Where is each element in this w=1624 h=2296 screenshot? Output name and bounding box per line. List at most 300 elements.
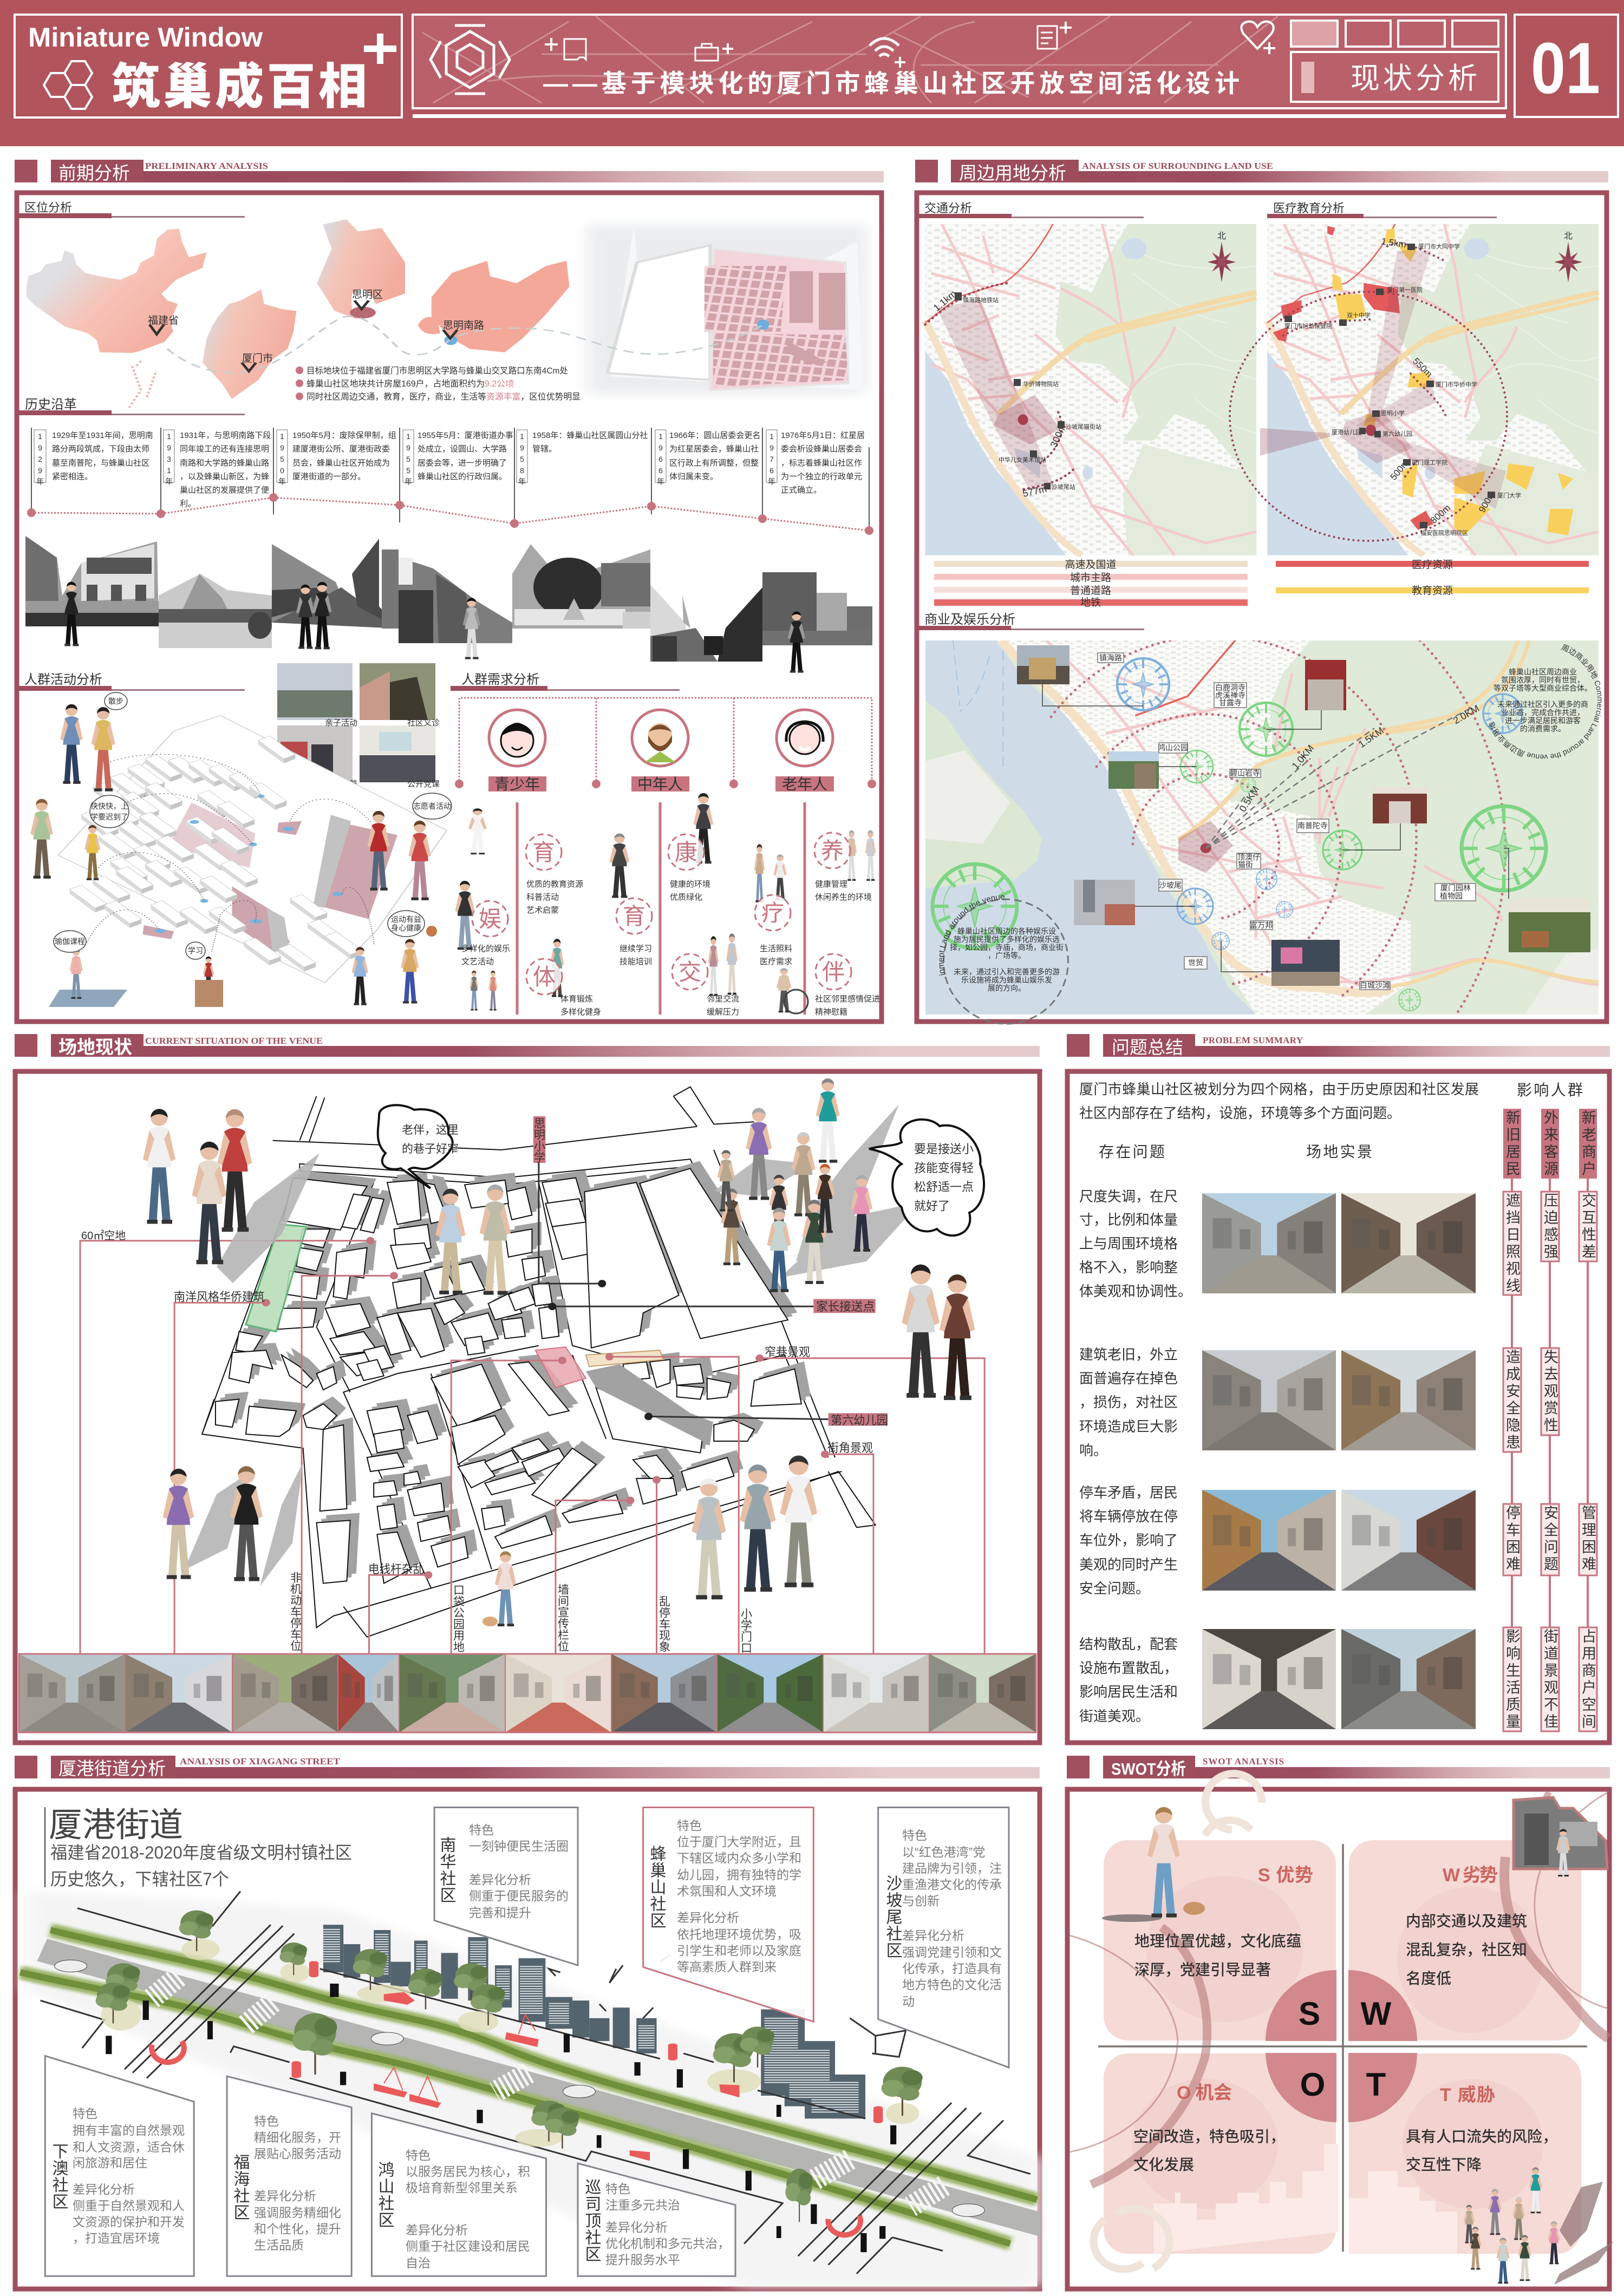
callout: entertainment land (939, 895, 1069, 1025)
section header: preliminary analysis: 前期分析 (58, 163, 130, 183)
callout lines (80, 1241, 984, 1653)
speech bubbles: 快快快，上 (90, 802, 128, 810)
history text: 委会析设蜂巢山居委会 (781, 444, 862, 454)
history text: 员会，蜂巢山社区开始成为 (292, 459, 390, 468)
map: commerce and entertainment: 0.5KM (1237, 784, 1261, 814)
heading: demand analysis: 人群需求分析 (461, 672, 539, 687)
map: commerce and entertainment: 1.5KM (1356, 725, 1386, 750)
demand text: 多样化健身 (560, 1008, 601, 1017)
site labels: 电线杆杂乱 (368, 1562, 424, 1576)
map: medical and education: 900m (1477, 489, 1497, 514)
timeline: 1958年 (518, 432, 526, 488)
community: nanhua: 一刻钟便民生活圈 (469, 1839, 569, 1853)
map: transport: 1.1km (931, 288, 958, 313)
speech bubble: pick up (869, 1120, 984, 1235)
demand text: 文艺活动 (461, 957, 494, 966)
street illustration (20, 1807, 1040, 2286)
swot strengths: 地理位置优越，文化底蕴 (1134, 1933, 1301, 1950)
people: demand (455, 793, 876, 1013)
location description (296, 366, 581, 402)
heading: location analysis: 区位分析 (24, 201, 72, 214)
community: nanhua (438, 1823, 569, 1920)
section header: problem summary (1067, 1034, 1610, 1057)
location maps (27, 219, 866, 408)
swot threats: T 威胁 (1440, 2085, 1495, 2105)
section header: xiagang street (15, 1756, 1040, 1778)
problem text: 车位外，影响了 (1079, 1532, 1178, 1548)
map labels: 思明南路 (443, 319, 484, 331)
demand text: 技能培训 (619, 957, 652, 966)
community: fuhai: 福海社区 (231, 2154, 250, 2221)
demand text: 健康的环境 (670, 879, 710, 889)
site labels: 家长接送点 (816, 1300, 875, 1313)
community: shapowei: 动 (902, 1994, 915, 2009)
title box (15, 15, 402, 117)
site photos strip (19, 1654, 1036, 1732)
timeline: 1931年 (165, 432, 173, 488)
speech bubble: narrow alley: 的巷子好窄 (402, 1143, 459, 1155)
swot opportunities: 空间改造，特色吸引， (1133, 2128, 1285, 2145)
community: fuhai: 强调服务精细化 (254, 2206, 341, 2220)
group labels: 青少年 (494, 776, 540, 793)
history text: 管辖。 (532, 444, 557, 454)
map labels: 福建省 (148, 315, 179, 326)
demand text: 体育锻炼 (560, 995, 593, 1004)
red street furniture (291, 1961, 883, 2161)
demand circles: 伴 (822, 959, 845, 985)
location photos (1017, 645, 1590, 986)
map labels: 顶澳仔 (1237, 853, 1260, 861)
avatar: teen (489, 710, 545, 766)
history text: 利。 (180, 499, 196, 508)
map labels: 猫街 (1238, 860, 1253, 869)
community: xunsiding: 特色 (605, 2182, 630, 2196)
swot opportunities: 文化发展 (1133, 2156, 1194, 2173)
title box: Miniature Window (28, 22, 263, 53)
community: fengchaoshan: 幼儿园，拥有独特的学 (677, 1868, 801, 1882)
leader lines (1042, 684, 1509, 972)
community: xiaao: ，打造宜居环境 (73, 2231, 160, 2245)
section header: swot: SWOT ANALYSIS (1203, 1756, 1284, 1767)
problem text: 将车辆停放在停 (1079, 1508, 1178, 1525)
map: medical and education: 1.5km (1380, 236, 1407, 250)
section header: xiagang street: ANALYSIS OF XIAGANG STREET (180, 1756, 341, 1767)
people on photos (62, 582, 805, 673)
demand circles: 育 (623, 904, 645, 929)
impact tags: 停车困难 (1504, 1505, 1521, 1573)
swot opportunities (1133, 2083, 1285, 2173)
map labels: 植物园 (1440, 892, 1463, 900)
community: fuhai: 特色 (254, 2114, 279, 2128)
swot quadrants: W (1361, 1996, 1392, 2032)
group labels: 老年人 (782, 776, 827, 793)
speech bubbles: 身心健康 (391, 924, 421, 932)
problem text: 结构散乱，配套 (1079, 1636, 1178, 1652)
site labels (81, 1117, 888, 1653)
community: hongshan: 自治 (406, 2256, 431, 2270)
site locator map (587, 225, 866, 394)
demand text: 社区邻里感情促进 (815, 995, 880, 1004)
section header: site status: 场地现状 (58, 1037, 132, 1058)
demand text: 邻里交流 (707, 994, 739, 1004)
legend: medical education: 教育资源 (1412, 585, 1453, 597)
problem text: 停车矛盾，居民 (1079, 1484, 1178, 1501)
community: fengchaoshan: 蜂巢山社区 (648, 1845, 666, 1929)
subtitle banner (413, 15, 1506, 118)
problem text: 响。 (1079, 1442, 1107, 1458)
community: shapowei: 特色 (902, 1828, 927, 1842)
panel: swot (1067, 1774, 1614, 2289)
community: shapowei: 重渔港文化的传承 (902, 1878, 1002, 1892)
community: fuhai: 展贴心服务活动 (254, 2147, 341, 2161)
pedestrians (106, 1984, 896, 2252)
map: medical and education: 厦港幼儿园 (1332, 429, 1361, 436)
community: fengchaoshan: 引学生和老师以及家庭 (677, 1944, 801, 1958)
community: fengchaoshan: 位于厦门大学附近，且 (677, 1835, 801, 1849)
history text: 建厦港街公所、厦港街政委 (292, 444, 390, 454)
community: nanhua: 特色 (469, 1823, 494, 1837)
demand text: 健康管理 (815, 880, 847, 889)
demand circles (472, 833, 851, 995)
section tag (1291, 52, 1498, 102)
demand text: 优质的教育资源 (526, 880, 583, 889)
map: medical and education: 厦门理工学院 (1412, 459, 1447, 466)
location description: 同时社区周边交通，教育，医疗，商业，生活等资源丰富，区位优势明显 (306, 392, 581, 402)
demand circles: 育 (532, 840, 555, 865)
problem text: 寸，比例和体量 (1079, 1212, 1178, 1228)
problem text: 街道美观。 (1079, 1708, 1150, 1724)
avatar: senior (777, 710, 833, 766)
site labels: 乱停车现象 (657, 1595, 670, 1652)
problem photos (1202, 1193, 1476, 1729)
site labels: 南洋风格华侨建筑 (174, 1290, 265, 1304)
callout: entertainment land: 场地周边娱乐用地 Entertainment Land around the venue (939, 895, 1005, 976)
community: xiaao: 差异化分析 (73, 2182, 135, 2196)
map: medical and education: 800m (1429, 502, 1452, 526)
heading: commerce (917, 612, 1144, 630)
problem text: 环境造成巨大影 (1079, 1418, 1178, 1435)
history text: 1955年5月：厦港街道办事 (418, 431, 513, 440)
intro text: 厦门市蜂巢山社区被划分为四个网格，由于历史原因和社区发展 (1079, 1081, 1479, 1097)
timeline: 1929年 (36, 432, 44, 488)
section tag: 现状分析 (1351, 62, 1477, 95)
speech bubbles: 学习 (188, 946, 203, 955)
heading: history: 历史沿革 (25, 397, 77, 412)
heading: medical education (1267, 201, 1497, 218)
map labels: 思明区 (352, 289, 383, 300)
community: fengchaoshan: 等高素质人群到来 (677, 1960, 777, 1974)
site labels: 思明小学 (533, 1117, 545, 1163)
timeline: 1976年 (767, 432, 776, 488)
history text: 1958年：蜂巢山社区属圆山分社 (532, 431, 648, 440)
legend: medical education: 医疗资源 (1412, 559, 1453, 571)
community: nanhua: 侧重于便民服务的 (469, 1889, 569, 1903)
speech bubble: pick up: 松舒适一点 (914, 1180, 974, 1194)
speech bubbles: 志愿者活动 (413, 802, 451, 810)
info boxes (45, 1807, 1009, 2276)
demand circles: 娱 (479, 906, 501, 932)
callout: commercial land: 等双子塔等大型商业综合体。 (1493, 684, 1592, 692)
problem text: 设施布置散乱， (1079, 1660, 1178, 1676)
section header: swot (1067, 1756, 1610, 1778)
compass markers (932, 658, 1546, 1011)
callout: entertainment land: 展的方向。 (988, 984, 1026, 992)
map labels: 鸿山公园 (1158, 743, 1188, 752)
history text: 体归属未变。 (669, 472, 718, 481)
street title: 厦港街道 (49, 1807, 183, 1844)
location description: 蜂巢山社区地块共计房屋169户，占地面积约为9.2公顷 (306, 379, 514, 389)
speech bubbles: 学要迟到了 (90, 813, 128, 821)
demand framework (455, 698, 880, 1017)
center sectors (1266, 1970, 1417, 2122)
community activity photos: 知识科普 (325, 780, 357, 789)
impact tags: 影响生活质量 (1504, 1628, 1521, 1731)
history text: ，标志着蜂巢山社区作 (781, 459, 862, 468)
impact tags: 新老商户 (1580, 1110, 1596, 1178)
community: fuhai: 精细化服务，开 (254, 2130, 341, 2144)
panel: problem summary (1067, 1071, 1609, 1743)
history text (52, 431, 865, 508)
site plan (80, 1087, 984, 1653)
site labels: 墙间宣传栏位 (557, 1584, 569, 1652)
demand text: 艺术启蒙 (526, 906, 559, 915)
map: medical and education: 北 (1564, 231, 1573, 241)
heading: transport: 交通分析 (924, 201, 972, 215)
section header: surrounding land use: 周边用地分析 (959, 163, 1066, 183)
community: shapowei: 与创新 (902, 1894, 940, 1908)
site labels: 60㎡空地 (81, 1229, 126, 1242)
colour squares (1291, 21, 1498, 47)
map: transport: 北 (1217, 231, 1226, 241)
community: hongshan: 差异化分析 (406, 2223, 468, 2237)
community: xunsiding: 注重多元共治 (605, 2198, 680, 2212)
community: xiaao: 下澳社区 (50, 2143, 68, 2210)
panel: preliminary analysis (16, 193, 882, 1022)
map labels: 南普陀寺 (1297, 821, 1328, 830)
map: medical and education: 思明小学 (1381, 409, 1405, 417)
map labels: 世贸 (1188, 958, 1203, 967)
speech bubble: pick up: 要是接送小 (914, 1142, 974, 1156)
swot quadrants: T (1366, 2066, 1386, 2103)
community: fengchaoshan: 术氛围和人文环境 (677, 1884, 777, 1898)
map: fujian (203, 290, 296, 399)
community: hongshan: 特色 (406, 2148, 431, 2162)
community: xiaao: 特色 (73, 2107, 97, 2121)
community activity photos: 公开党课 (407, 780, 440, 789)
community: nanhua: 南华社区 (438, 1836, 456, 1903)
people: activities (30, 704, 437, 1007)
community: shapowei: 差异化分析 (902, 1928, 964, 1942)
impact tags: 压迫感强 (1542, 1193, 1558, 1261)
impact tags: 外来客源 (1542, 1110, 1558, 1178)
swot quadrants (1069, 1774, 1608, 2269)
title box: 筑巢成百相 (112, 60, 367, 114)
panel: surrounding land use (914, 191, 1609, 1025)
demand text: 缓解压力 (707, 1008, 739, 1017)
impact tags: 新旧居民 (1504, 1110, 1521, 1178)
people: site (143, 1078, 975, 1626)
map: siming (317, 219, 405, 319)
section header: preliminary analysis: PRELIMINARY ANALYSIS (145, 161, 268, 171)
community: shapowei: 沙坡尾社区 (884, 1875, 902, 1959)
map labels: 甘露寺 (1219, 698, 1242, 707)
history text: 紧密相连。 (52, 472, 93, 481)
section header: swot: SWOT分析 (1111, 1759, 1186, 1778)
swot strengths: 深厚，党建引导显著 (1134, 1961, 1271, 1978)
history text: 同年竣工的还有连接思明 (180, 444, 269, 454)
problem text: 美观的同时产生 (1079, 1556, 1178, 1573)
community: fuhai: 和个性化，提升 (254, 2222, 341, 2236)
community: hongshan: 极培育新型邻里关系 (406, 2181, 518, 2195)
impact tags: 占用商户空间 (1580, 1628, 1596, 1731)
timeline (27, 428, 873, 535)
impact tags: 遮挡日照视线 (1504, 1193, 1521, 1295)
community activity photos: 亲子活动 (325, 718, 357, 728)
legend: transport: 地铁 (1080, 597, 1101, 609)
impact tags: 管理困难 (1580, 1505, 1596, 1573)
community: xunsiding: 提升服务水平 (605, 2253, 680, 2267)
icon: chat (564, 39, 586, 60)
community: hongshan: 以服务居民为核心，积 (406, 2164, 530, 2179)
map: medical and education: 厦门市华侨中学 (1436, 381, 1477, 388)
table headings: 存在问题 (1099, 1143, 1165, 1160)
trees (96, 1911, 923, 2222)
section header: surrounding land use: ANALYSIS OF SURROUNDING LAND USE (1082, 161, 1273, 171)
section header: site status (15, 1034, 1040, 1058)
icon: document (1038, 26, 1057, 49)
community: xiaao: 和人文资源，适合休 (73, 2140, 185, 2154)
map: commerce and entertainment: 2.0KM (1451, 703, 1481, 726)
map: transport: 华侨博物院站 (1023, 380, 1059, 388)
impact tags: 失去观赏性 (1542, 1349, 1558, 1435)
community: fuhai: 差异化分析 (254, 2189, 316, 2203)
history text: 1929年至1931年间，思明南 (52, 431, 153, 440)
community: hongshan: 鸿山社区 (376, 2161, 394, 2228)
swot weaknesses (1406, 1865, 1527, 1987)
icon: wifi (870, 38, 899, 56)
impact tags: 造成安全隐患 (1504, 1349, 1521, 1451)
building cutout (1514, 1797, 1607, 1876)
map labels: 虎溪禅寺 (1215, 691, 1245, 699)
swot weaknesses: 名度低 (1406, 1970, 1451, 1987)
photo: residential tower (762, 572, 872, 645)
photo: arcade (25, 536, 159, 626)
community: shapowei: 强调党建引领和文 (902, 1945, 1002, 1959)
table headings (1099, 1082, 1583, 1160)
group labels: 中年人 (637, 776, 683, 793)
site labels: 第六幼儿园 (831, 1414, 888, 1427)
history text: 路分两段筑成，下段由太师 (52, 444, 149, 454)
callout: entertainment land: 施为居民提供了多样化的娱乐选 (954, 935, 1060, 944)
community: fengchaoshan (648, 1819, 801, 1974)
demand circles: 体 (533, 964, 556, 990)
community: hongshan: 侧重于社区建设和居民 (406, 2239, 530, 2253)
community: xunsiding (583, 2179, 730, 2267)
section header: preliminary analysis (15, 160, 884, 183)
demand text: 精神慰籍 (815, 1007, 847, 1017)
demand circles: 交 (679, 959, 701, 985)
impact tags: 安全问题 (1542, 1505, 1558, 1573)
community: xunsiding: 巡司顶社区 (583, 2179, 601, 2262)
community: nanhua: 完善和提升 (469, 1906, 531, 1920)
demand circles: 疗 (761, 900, 784, 926)
intro text: 社区内部存在了结构，设施，环境等多个方面问题。 (1079, 1105, 1401, 1121)
community: shapowei: 以“红色港湾”党 (902, 1845, 985, 1859)
problem text: 面普遍存在掉色 (1079, 1370, 1178, 1386)
callout: entertainment land: 择，如公园，寺庙，商场，商业街 (950, 943, 1064, 952)
community: fengchaoshan: 下辖区域内众多小学和 (677, 1851, 801, 1865)
problem text (1079, 1188, 1192, 1724)
map: transport: 577m (1022, 483, 1048, 499)
historic street photos (25, 536, 872, 673)
speech bubble: narrow alley (378, 1105, 459, 1188)
timeline: 1966年 (656, 432, 665, 488)
swot opportunities: O 机会 (1177, 2083, 1232, 2103)
community: xiaao: 闲旅游和居住 (73, 2156, 147, 2170)
community: xiaao: 拥有丰富的自然景观 (73, 2123, 185, 2137)
speech bubbles: 瑜伽课程 (55, 937, 85, 946)
photo: tree and pavilion (512, 544, 650, 629)
map: medical and education: 厦门大学 (1497, 492, 1521, 499)
map: road area (418, 261, 569, 352)
map labels: 白城沙滩 (1360, 981, 1390, 990)
section header: xiagang street: 厦港街道分析 (58, 1758, 166, 1778)
section header: surrounding land use (915, 160, 1608, 183)
map: transport (925, 224, 1256, 555)
photo: car lane (650, 585, 762, 662)
legend: transport: 高速及国道 (1065, 559, 1117, 571)
map: medical and education: 550m (1411, 356, 1434, 380)
heading: activity analysis: 人群活动分析 (24, 672, 102, 687)
history text: 为红星居委会，蜂巢山社 (669, 444, 759, 454)
icon: briefcase (695, 44, 718, 61)
legend: transport (934, 559, 1248, 609)
map: transport: 沙坡尾站 (1052, 483, 1075, 490)
location description: 目标地块位于福建省厦门市思明区大学路与蜂巢山交叉路口东南4Cm处 (306, 366, 568, 376)
callout: entertainment land: ，广场等。 (988, 951, 1026, 960)
timeline: 1950年 (278, 432, 286, 488)
history text: 1950年5月：废除保甲制，组 (292, 431, 396, 440)
map: commerce and entertainment: 1.0KM (1290, 743, 1316, 771)
skyline (323, 1925, 865, 2118)
map: china (27, 228, 207, 353)
callout: commercial land: 蜂巢山社区周边商业 (1509, 668, 1577, 676)
demand text: 优质绿化 (670, 893, 702, 902)
map labels: 沙坡尾 (1159, 881, 1182, 889)
table headings: 场地实景 (1306, 1143, 1372, 1160)
swot weaknesses: 混乱复杂，社区知 (1406, 1941, 1527, 1958)
problem text: 体美观和协调性。 (1079, 1283, 1192, 1299)
problem text: ，损伤，对社区 (1079, 1394, 1178, 1410)
heading: history (17, 397, 245, 415)
swot threats: 交互性下降 (1406, 2156, 1482, 2173)
speech bubbles (54, 692, 452, 959)
panel: site status (15, 1071, 1040, 1743)
callout: entertainment land: 乐设施将成为蜂巢山娱乐发 (961, 976, 1052, 984)
page header band (0, 0, 1624, 146)
history text: 厦港街道的一部分。 (292, 472, 366, 481)
callout: commercial land: 业业态，完成合作共进， (1501, 708, 1584, 717)
history text: 正式确立。 (781, 486, 821, 495)
map: transport: 300m (1048, 422, 1068, 449)
callout: entertainment land: 未来，通过引入和完善更多的游 (954, 967, 1060, 976)
swot strengths (1134, 1865, 1313, 1978)
page number (1515, 15, 1618, 117)
speech bubble: narrow alley: 老伴，这里 (402, 1124, 459, 1136)
map labels: 厦门园林 (1440, 884, 1471, 892)
community: fengchaoshan: 特色 (677, 1819, 702, 1833)
impact tags: 街道景观不佳 (1542, 1628, 1558, 1731)
